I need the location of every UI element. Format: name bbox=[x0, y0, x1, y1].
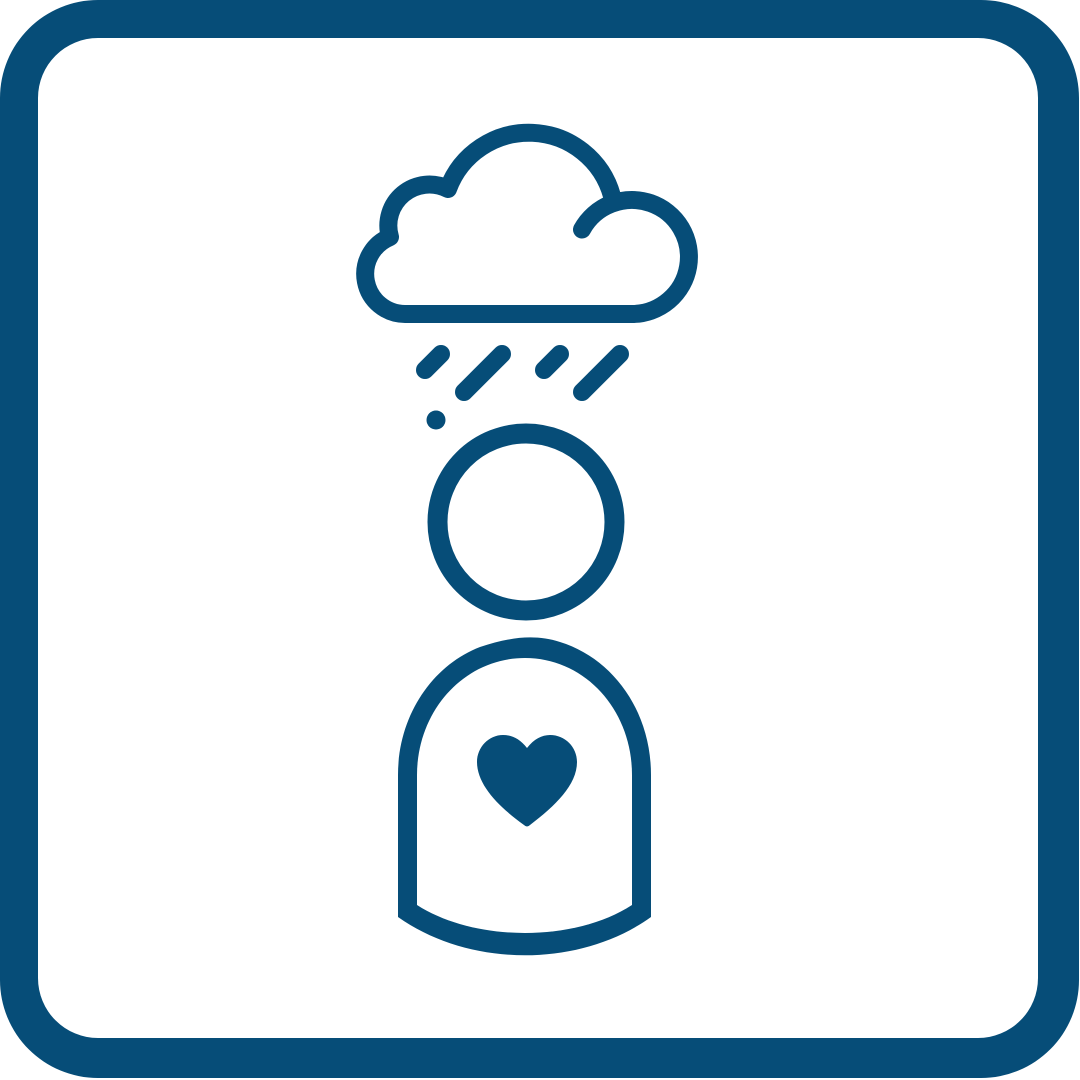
icon: person head bbox=[438, 434, 614, 610]
icon: rain cloud bbox=[365, 133, 689, 314]
icon: person body bbox=[398, 637, 651, 955]
icon: heart bbox=[477, 735, 577, 826]
icon: rain drops bbox=[425, 354, 620, 430]
